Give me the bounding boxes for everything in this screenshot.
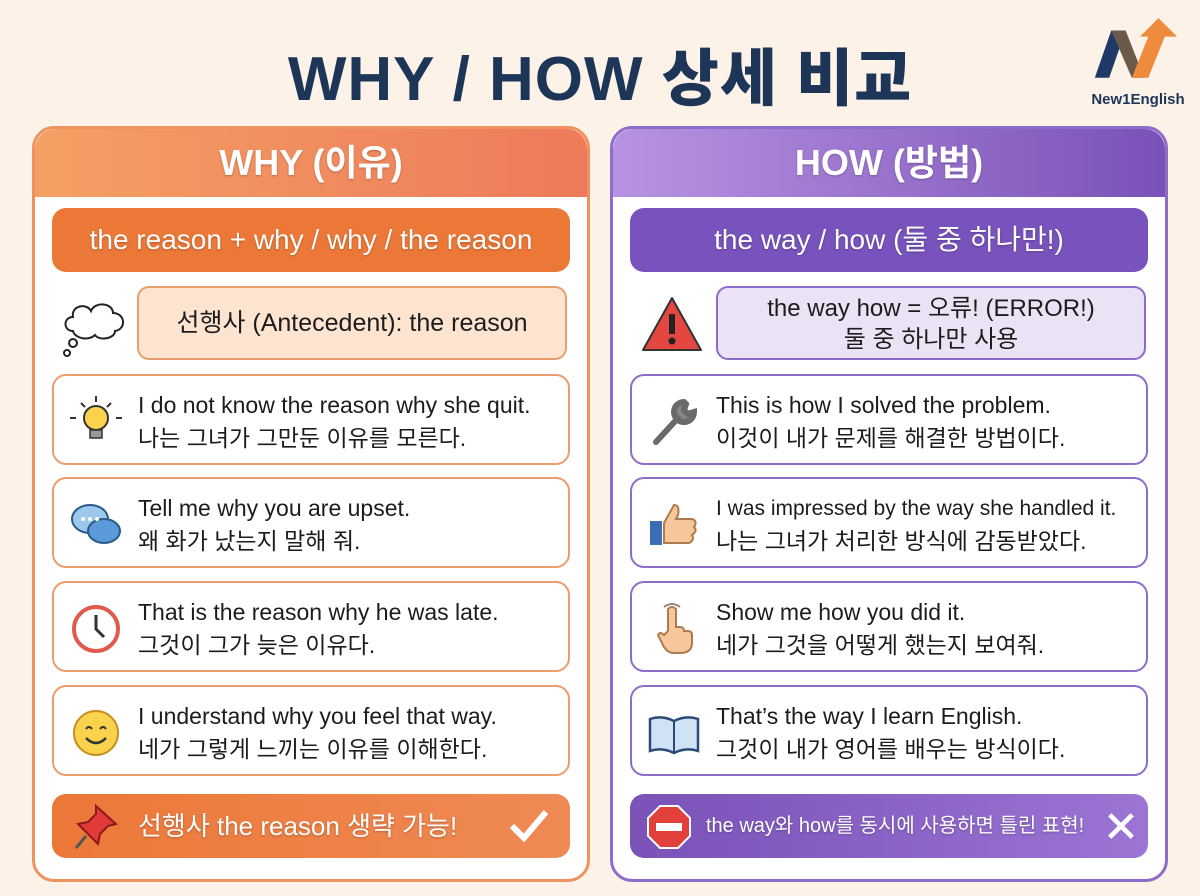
icon: check [510,810,548,842]
card: quit: 나는 그녀가 그만둔 이유를 모른다. [138,425,466,451]
error box: 둘 중 하나만 사용 [844,326,1018,353]
formula bar [630,208,1148,272]
formula bar: the reason + why / why / the reason [90,224,532,255]
heading: WHY [35,129,587,197]
card: learn: That’s the way I learn English. [716,703,1022,729]
card: quit: I do not know the reason why she quit. [138,392,531,418]
card: feel: 네가 그렇게 느끼는 이유를 이해한다. [138,736,487,762]
card: learn [630,685,1148,776]
panel: WHY [32,126,590,882]
bottom bar: omission [52,794,570,858]
card: late: 그것이 그가 늦은 이유다. [138,632,375,658]
antecedent box [137,286,567,360]
card: learn: 그것이 내가 영어를 배우는 방식이다. [716,736,1065,762]
card: solved [630,374,1148,465]
card: late [52,581,570,672]
card: solved: This is how I solved the problem. [716,392,1051,418]
card: upset: Tell me why you are upset. [138,495,410,521]
icon: warning [642,297,702,351]
card: impressed: I was impressed by the way she handled it. [716,497,1116,520]
card: impressed: 나는 그녀가 처리한 방식에 감동받았다. [716,528,1087,554]
icon: x [1108,813,1134,839]
title: WHY / HOW 상세 비교 [288,45,912,114]
card: quit [52,374,570,465]
heading: WHY: WHY (이유) [219,142,403,183]
card: solved: 이것이 내가 문제를 해결한 방법이다. [716,425,1065,451]
card: upset [52,477,570,568]
card: upset: 왜 화가 났는지 말해 줘. [138,528,360,554]
bottom bar: error warning [630,794,1148,858]
panel: HOW [610,126,1168,882]
error box: the way how = 오류! (ERROR!) [767,295,1095,322]
card: show: 네가 그것을 어떻게 했는지 보여줘. [716,632,1044,658]
card: show [630,581,1148,672]
logo: New1English [1091,91,1185,108]
card: late: That is the reason why he was late. [138,599,499,625]
card: feel: I understand why you feel that way. [138,703,497,729]
card: impressed [630,477,1148,568]
icon: thought cloud [63,303,124,357]
icon: pin [74,804,118,849]
card: show: Show me how you did it. [716,599,965,625]
logo [1091,18,1185,108]
bottom bar: omission: 선행사 the reason 생략 가능! [138,811,457,841]
antecedent box: 선행사 (Antecedent): the reason [176,309,528,337]
heading: HOW: HOW (방법) [795,142,983,183]
icon: stop [647,805,691,849]
heading: HOW [613,129,1165,197]
card: feel [52,685,570,776]
formula bar [52,208,570,272]
formula bar: the way / how (둘 중 하나만!) [714,224,1064,255]
bottom bar: error warning: the way와 how를 동시에 사용하면 틀린 표현! [706,815,1084,837]
error box [716,286,1146,360]
